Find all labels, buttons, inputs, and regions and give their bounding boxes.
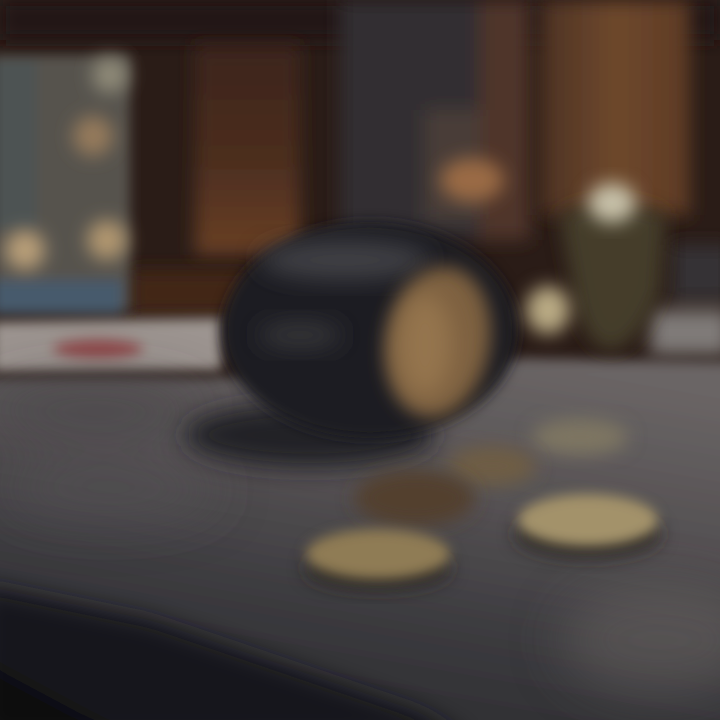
tablecloth strip [0, 318, 222, 372]
barrel shadow [185, 403, 435, 467]
wood panel: left [195, 45, 300, 255]
central dark column [340, 0, 530, 240]
coin: front left [306, 529, 450, 588]
barrel [222, 222, 518, 438]
table front edge shadow [0, 585, 470, 720]
vase [526, 183, 665, 350]
coin: middle back [448, 446, 536, 486]
right edge items [650, 245, 720, 355]
orange glow [440, 158, 504, 202]
coin: centre [355, 470, 475, 526]
barrel end: gold [374, 258, 502, 426]
table [0, 358, 720, 720]
window lights [5, 57, 128, 270]
table lighter reflection [0, 382, 720, 695]
wood panel: right [540, 0, 690, 215]
window panel: left [0, 55, 130, 314]
wood floor strip behind barrel [130, 270, 250, 315]
coin: front right [516, 494, 660, 556]
coin: back right [532, 419, 628, 455]
